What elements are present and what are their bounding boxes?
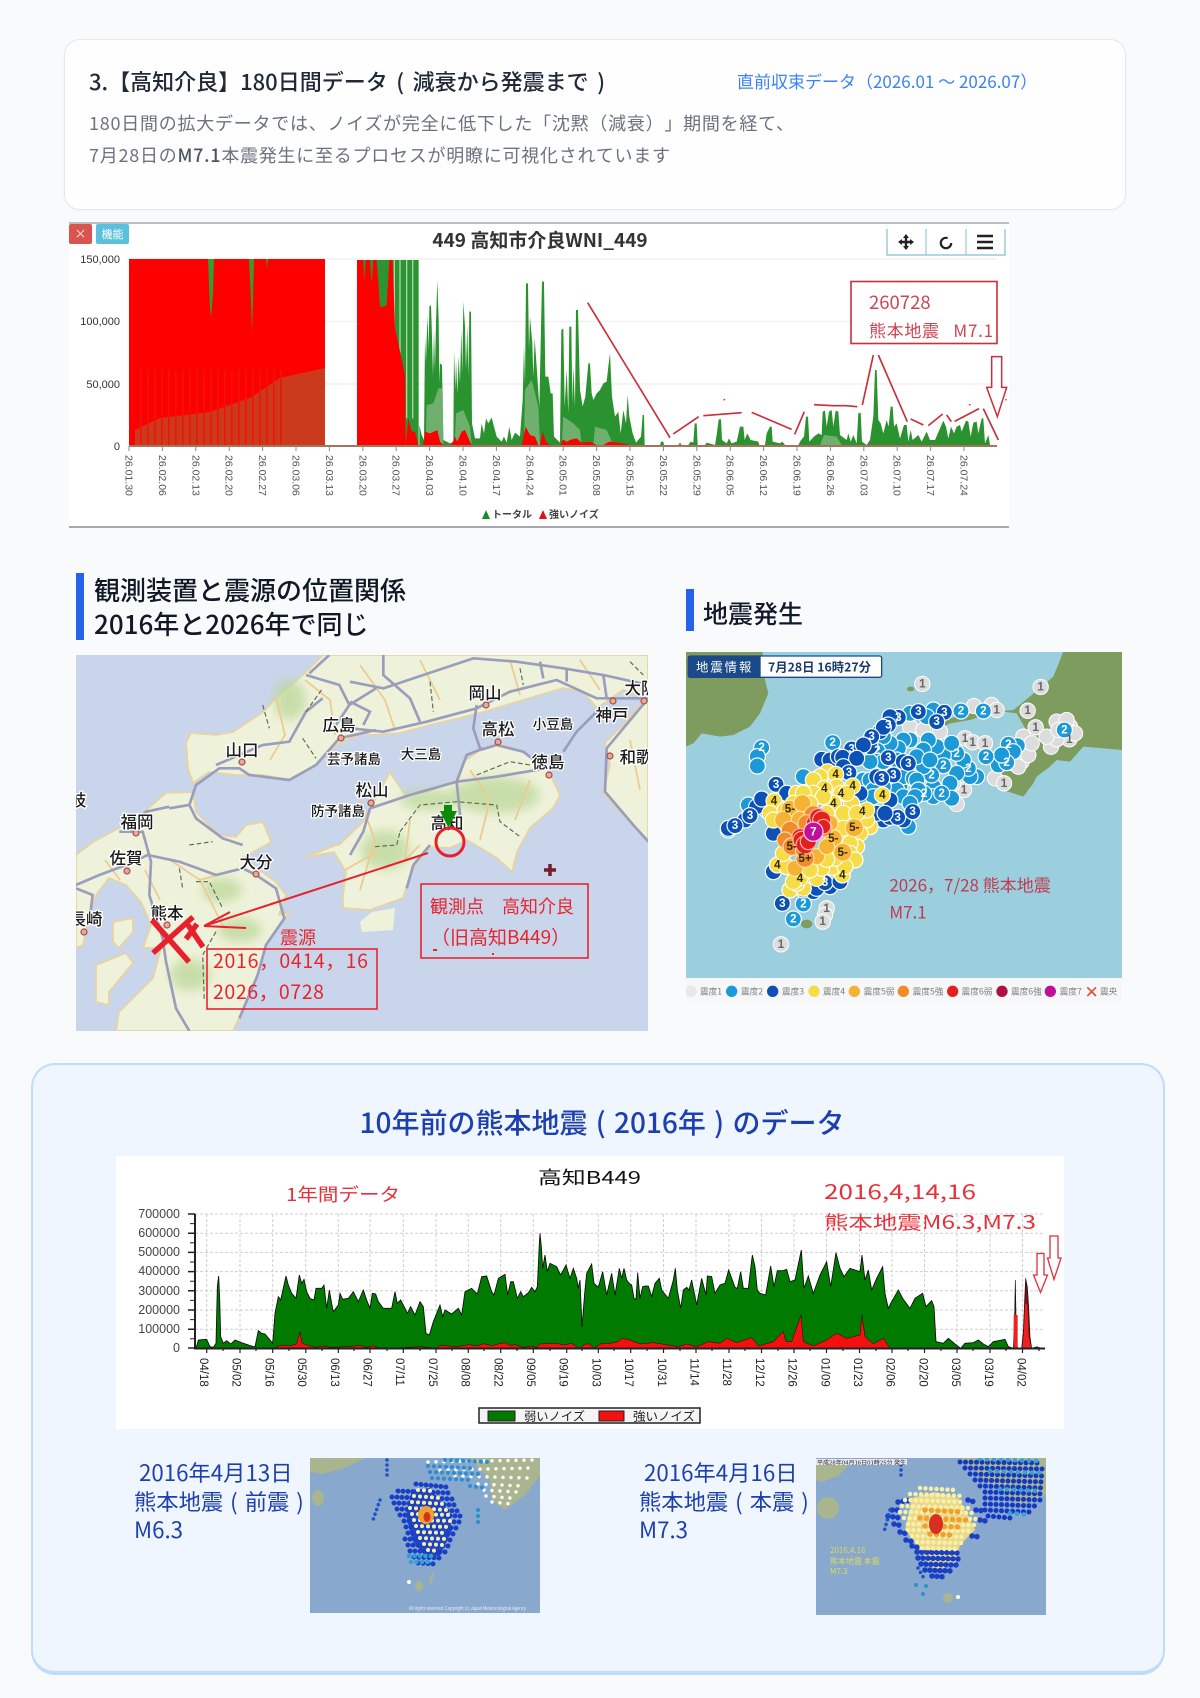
intensity digits: 5+ [798,852,812,865]
chart legend: 強いノイズ [633,1408,695,1424]
x axis ticks and date labels: 26.04.10 [456,455,468,496]
x axis ticks and date labels: 26.03.06 [290,455,302,496]
label: one year data: 1年間データ [286,1181,400,1207]
red saturated period [129,259,325,446]
x axis date labels: 05/02 [230,1358,242,1387]
intensity digits: 5- [786,840,797,853]
intensity digits: 1 [993,703,1000,716]
intensity legend [685,985,1118,997]
intensity legend: 震度4 [823,985,845,997]
text block: description: 180日間の拡大データでは、ノイズが完全に低下した「沈黙（減衰）」期間を経て、 [89,110,795,136]
intensity 5 upper markers [777,806,832,867]
x axis ticks and date labels: 26.02.13 [189,455,201,496]
intensity 1 markers [773,676,1083,952]
x axis date labels: 09/19 [557,1358,569,1387]
x axis ticks and date labels: 26.05.08 [590,455,602,496]
x axis ticks and date labels: 26.07.10 [891,455,903,496]
x axis ticks and date labels: 26.06.12 [757,455,769,496]
intensity digits: 1 [982,737,989,750]
intensity digits: 3 [885,751,892,764]
intensity digits: 4 [797,872,804,885]
icon: green pin arrow [440,805,457,828]
intensity digits: 3 [895,711,902,724]
x axis ticks and date labels: 26.07.17 [924,455,936,496]
land masses [76,655,648,1031]
close and function buttons: 機能 [102,226,124,242]
map place labels: 高松 [482,716,515,740]
intensity digits: 2 [938,787,945,800]
x axis date labels: 01/23 [851,1358,863,1387]
map place labels: 佐賀 [110,845,142,869]
label: Kumamoto M6.3 M7.3: 熊本地震M6.3,M7.3 [824,1208,1036,1235]
intensity digits: 7 [810,825,817,838]
annotation: 2026 Kumamoto earthquake: M7.1 [889,898,927,923]
close and function buttons: × [74,225,87,242]
map: seismic intensity distribution [686,652,1122,997]
y axis labels: 50,000 [86,379,120,391]
intensity digits: 1 [778,938,785,951]
heading: ten years ago data: 10年前の熊本地震 ( 2016年 ) のデータ [360,1102,844,1142]
intensity digits: 2 [758,741,765,754]
intensity digits: 3 [894,811,901,824]
intensity digits: 3 [868,730,875,743]
intensity digits: 3 [747,809,754,822]
intensity digits: 3 [890,768,897,781]
intensity digits: 2 [790,912,797,925]
map: mainshock intensity thumbnail: 平成28年04月16日01時25分 発生 [817,1458,907,1466]
x axis date labels: 04/18 [197,1358,209,1387]
chart legend [482,506,599,521]
label: epicenter: 震源 [280,924,316,950]
y axis labels: 150,000 [80,254,120,266]
x axis date labels: 03/19 [982,1358,994,1387]
intensity digits: 4 [830,797,837,810]
x axis date labels: 10/31 [655,1358,667,1387]
map place labels: 広島 [322,712,356,736]
intensity digits: 4 [849,779,856,792]
chart legend [479,1408,700,1424]
x axis ticks and date labels: 26.04.24 [523,455,535,496]
intensity digits: 4 [859,805,866,818]
chart legend: 弱いノイズ [524,1408,585,1424]
arrow: observation point to epicenter [204,853,428,928]
map: Kyushu and Shikoku with observation point [76,655,648,1031]
arrow: M7.1 event marker [987,357,1007,417]
text block: 2016 April 16 mainshock: M7.3 [639,1513,688,1545]
x axis date labels: 09/05 [524,1358,536,1387]
annotation: 2026 Kumamoto earthquake [889,872,1051,923]
intensity digits: 1 [1032,721,1039,734]
intensity 2 markers [720,702,1072,927]
intensity digits: 2 [921,787,928,800]
x axis ticks and date labels: 26.02.20 [223,455,235,496]
spiky total noise, first half [357,260,646,445]
map: mainshock intensity thumbnail: M7.3 [830,1566,848,1577]
hand-drawn red envelope line [588,303,1007,440]
y axis labels: 300000 [138,1284,180,1298]
x axis date labels: 12/12 [753,1358,765,1387]
chart: Kochi B449 one-year noise chart [116,1156,1064,1429]
intensity digits: 2 [928,768,935,781]
x axis date labels: 10/17 [622,1358,634,1387]
terrain shading [170,680,540,991]
map place labels: 福岡 [120,809,154,833]
x axis date labels: 12/26 [786,1358,798,1387]
close and function buttons [69,224,129,244]
map place labels: 徳島 [532,749,564,773]
y axis labels: 700000 [138,1207,180,1221]
intensity digits: 2 [800,897,807,910]
intensity digits: 4 [839,868,846,881]
y axis labels: 500000 [138,1245,180,1259]
y axis labels: 200000 [138,1303,180,1317]
intensity legend: 震度2 [741,985,763,997]
arrows: quake markers [1034,1236,1061,1292]
x axis date labels: 07/25 [426,1358,438,1387]
x axis ticks and date labels: 26.05.15 [624,455,636,496]
callout: epicenter dates: 2026，0728 [213,976,324,1005]
spiky total noise, second half [660,370,990,445]
x axis date labels: 02/20 [916,1358,928,1387]
annotation: 2026 Kumamoto earthquake: 2026，7/28 熊本地震 [889,872,1051,897]
intensity 4 markers [762,764,890,898]
intensity digits: 3 [822,876,829,889]
y axis labels: 400000 [138,1264,180,1278]
x axis ticks and date labels: 26.01.30 [122,455,134,496]
intensity digits: 3 [933,715,940,728]
axes [188,1214,1045,1353]
intensity digits: 1 [823,902,830,915]
x axis ticks and date labels: 26.04.17 [490,455,502,496]
map place labels: 神戸 [596,702,628,726]
intensity digits: 1 [919,677,926,690]
intensity digits: 1 [1001,777,1008,790]
callout: 260728 M7.1 [851,282,997,344]
x axis ticks and date labels [122,446,970,496]
text block: 2016 April 13 foreshock: 2016年4月13日 [139,1456,293,1488]
intensity legend: 震度7 [1060,985,1082,997]
intensity digits: 1 [1024,704,1031,717]
x axis ticks and date labels: 26.06.26 [824,455,836,496]
x axis ticks and date labels: 26.05.29 [690,455,702,496]
intensity digits: 2 [1003,756,1010,769]
x axis date labels: 08/22 [491,1358,503,1387]
x axis date labels: 02/06 [884,1358,896,1387]
intensity 7 marker [804,822,823,841]
intensity digits: 1 [1037,680,1044,693]
chart title: 高知B449 [538,1164,641,1190]
map place labels: 岡山 [468,680,502,704]
intensity legend: 震度5強 [913,985,944,997]
callout: 260728 M7.1: 260728 [869,289,931,315]
y axis labels [80,254,120,453]
x axis date labels: 11/28 [720,1358,732,1386]
callout: observation point: 観測点 高知介良 [430,893,574,919]
x axis date labels: 05/16 [262,1358,274,1387]
y axis labels: 100,000 [80,316,120,328]
x axis date labels: 05/30 [295,1358,307,1387]
map: mainshock intensity thumbnail: 熊本地震 本震 [830,1556,880,1567]
intensity 6 markers [792,809,831,854]
x axis ticks and date labels: 26.03.27 [390,455,402,496]
text block: 2016 April 13 foreshock: M6.3 [134,1513,183,1545]
intensity digits: 1 [969,736,976,749]
intensity digits: 4 [879,788,886,801]
map: mainshock intensity thumbnail [816,1458,1046,1615]
x axis ticks and date labels: 26.05.01 [557,455,569,496]
roads east [350,655,648,888]
minor roads [105,660,640,930]
sub-heading link text: 直前収束データ（2026.01 ～ 2026.07） [737,68,1037,93]
text block: description: 7月28日のM7.1本震発生に至るプロセスが明瞭に可視化されています [89,142,671,168]
intensity digits: 3 [941,706,948,719]
time badge: 地震情報 [696,657,753,675]
y axis labels [138,1207,180,1355]
x axis date labels: 11/14 [688,1358,700,1387]
y axis labels: 0 [114,441,120,453]
intensity digits: 3 [773,778,780,791]
x axis ticks and date labels: 26.03.20 [356,455,368,496]
intensity legend: 震度1 [700,985,722,997]
map: mainshock intensity thumbnail: 2016.4.16 [830,1545,866,1556]
chart title: 449 高知市介良WNI_449 [432,226,648,253]
map place labels: 山口 [226,737,258,761]
map place labels: 大分 [240,849,273,873]
text block: 2016 April 16 mainshock [639,1456,809,1545]
intensity legend: 震央 [1100,985,1118,997]
y axis labels: 100000 [138,1322,180,1336]
map place labels: 松山 [356,777,388,801]
intensity digits: 2 [958,704,965,717]
heading: instrument and epicenter location: 2016年と2026年で同じ [94,604,369,642]
heading: instrument and epicenter location: 観測装置と震源の位置関係 [94,571,406,608]
map place labels: 防予諸島 [311,800,365,820]
time badge: 7月28日 16時27分 [768,657,872,675]
intensity digits: 4 [832,768,839,781]
x axis ticks and date labels: 26.06.19 [790,455,802,496]
icon: plus marker [544,864,556,876]
intensity 5 lower markers [775,795,863,876]
panel: 180-day data intro card [64,39,1126,210]
chart legend: 強いノイズ [549,506,599,521]
map place labels: 熊本 [150,900,184,924]
intensity digits: 3 [732,819,739,832]
intensity digits: 2 [965,762,972,775]
intensity legend: 震度6強 [1011,985,1042,997]
intensity digits: 3 [848,742,855,755]
text block: 2016 April 16 mainshock: 熊本地震 ( 本震 ) [639,1484,809,1516]
roads west [76,655,376,1031]
land areas [686,652,1122,928]
heading: earthquake occurrence: 地震発生 [703,595,803,631]
x axis date labels: 10/03 [589,1358,601,1387]
intensity digits: 1 [1066,733,1073,746]
callout: 260728 M7.1: 熊本地震 M7.1 [869,317,993,342]
intensity digits [732,677,1073,951]
x axis ticks and date labels: 26.02.06 [156,455,168,496]
x axis ticks and date labels: 26.05.22 [657,455,669,496]
intensity digits: 2 [980,704,987,717]
intensity digits: 2 [1005,738,1012,751]
x axis date labels: 04/02 [1014,1358,1026,1387]
map place labels: 小豆島 [533,713,573,733]
toolbar icons [887,229,1005,255]
panel: 2016 Kumamoto earthquake data [31,1063,1165,1675]
x axis ticks and date labels: 26.06.05 [724,455,736,496]
x axis date labels: 06/27 [360,1358,372,1387]
label: 2016 quake dates: 2016,4,14,16 [824,1176,976,1205]
x axis date labels [197,1358,1026,1387]
intensity digits: 4 [838,787,845,800]
map: foreshock intensity thumbnail [310,1458,540,1613]
intensity digits: 1 [961,783,968,796]
time badge [688,656,882,677]
intensity digits: 2 [940,759,947,772]
text block: 2016 April 13 foreshock: 熊本地震 ( 前震 ) [134,1484,304,1516]
heading: instrument and epicenter location [76,571,406,642]
callout: observation point: （旧高知B449） [431,923,570,950]
x axis date labels: 06/13 [328,1358,340,1387]
intensity digits: 3 [885,718,892,731]
intensity digits: 2 [829,736,836,749]
x axis ticks and date labels: 26.07.24 [958,455,970,496]
intensity digits: 2 [983,750,990,763]
chart: 449 kochi 180-day noise chart [69,222,1009,528]
intensity digits: 4 [821,782,828,795]
icon: epicenter crosses [152,917,203,962]
intensity legend: 震度6弱 [962,985,992,997]
x axis date labels: 03/05 [949,1358,961,1387]
intensity digits: 5- [837,846,848,859]
heading: 180-day data: 3.【高知介良】180日間データ ( 減衰から発震まで ) [89,65,605,97]
map place labels: 高知 [430,810,464,834]
x axis ticks and date labels: 26.03.13 [323,455,335,496]
text block: 2016 April 13 foreshock [134,1456,304,1545]
text block: description [89,110,795,168]
x axis ticks and date labels: 26.04.03 [423,455,435,496]
intensity 3 markers [720,704,952,911]
intensity digits: 3 [909,805,916,818]
intensity digits: 1 [819,915,826,928]
intensity digits: 4 [774,858,781,871]
intensity digits: 2 [953,747,960,760]
x axis date labels: 07/11 [393,1358,405,1386]
intensity digits: 5- [849,821,860,834]
city markers [81,698,647,935]
callout: epicenter dates: 2016，0414，16 [213,945,368,974]
map place labels: 大三島 [401,743,441,763]
intensity digits: 5- [785,802,795,815]
intensity digits: 3 [905,757,912,770]
intensity digits: 2 [1061,723,1068,736]
intensity digits: 3 [779,897,786,910]
x axis date labels: 08/08 [459,1358,471,1387]
intensity digits: 1 [962,732,969,745]
intensity digits: 3 [878,772,885,785]
intensity digits: 5- [828,832,839,845]
callout: observation point [421,884,588,958]
text block: 2016 April 16 mainshock: 2016年4月16日 [644,1456,798,1488]
x axis ticks and date labels: 26.02.27 [256,455,268,496]
y axis labels: 600000 [138,1226,180,1240]
chart legend: トータル [492,506,532,521]
x axis date labels: 01/09 [818,1358,830,1387]
intensity digits: 3 [846,766,853,779]
intensity legend: 震度3 [782,985,804,997]
intensity digits: 4 [771,794,778,807]
map place labels [70,675,658,930]
y axis labels: 0 [173,1341,180,1355]
map place labels: 芸予諸島 [327,748,381,768]
intensity digits: 2 [874,744,881,757]
intensity legend: 震度5弱 [864,985,894,997]
icon: observation point circle [436,828,464,856]
area series: weak and strong noise [196,1233,1042,1348]
x axis ticks and date labels: 26.07.03 [857,455,869,496]
intensity digits: 3 [915,705,922,718]
callout: epicenter dates [207,945,377,1009]
